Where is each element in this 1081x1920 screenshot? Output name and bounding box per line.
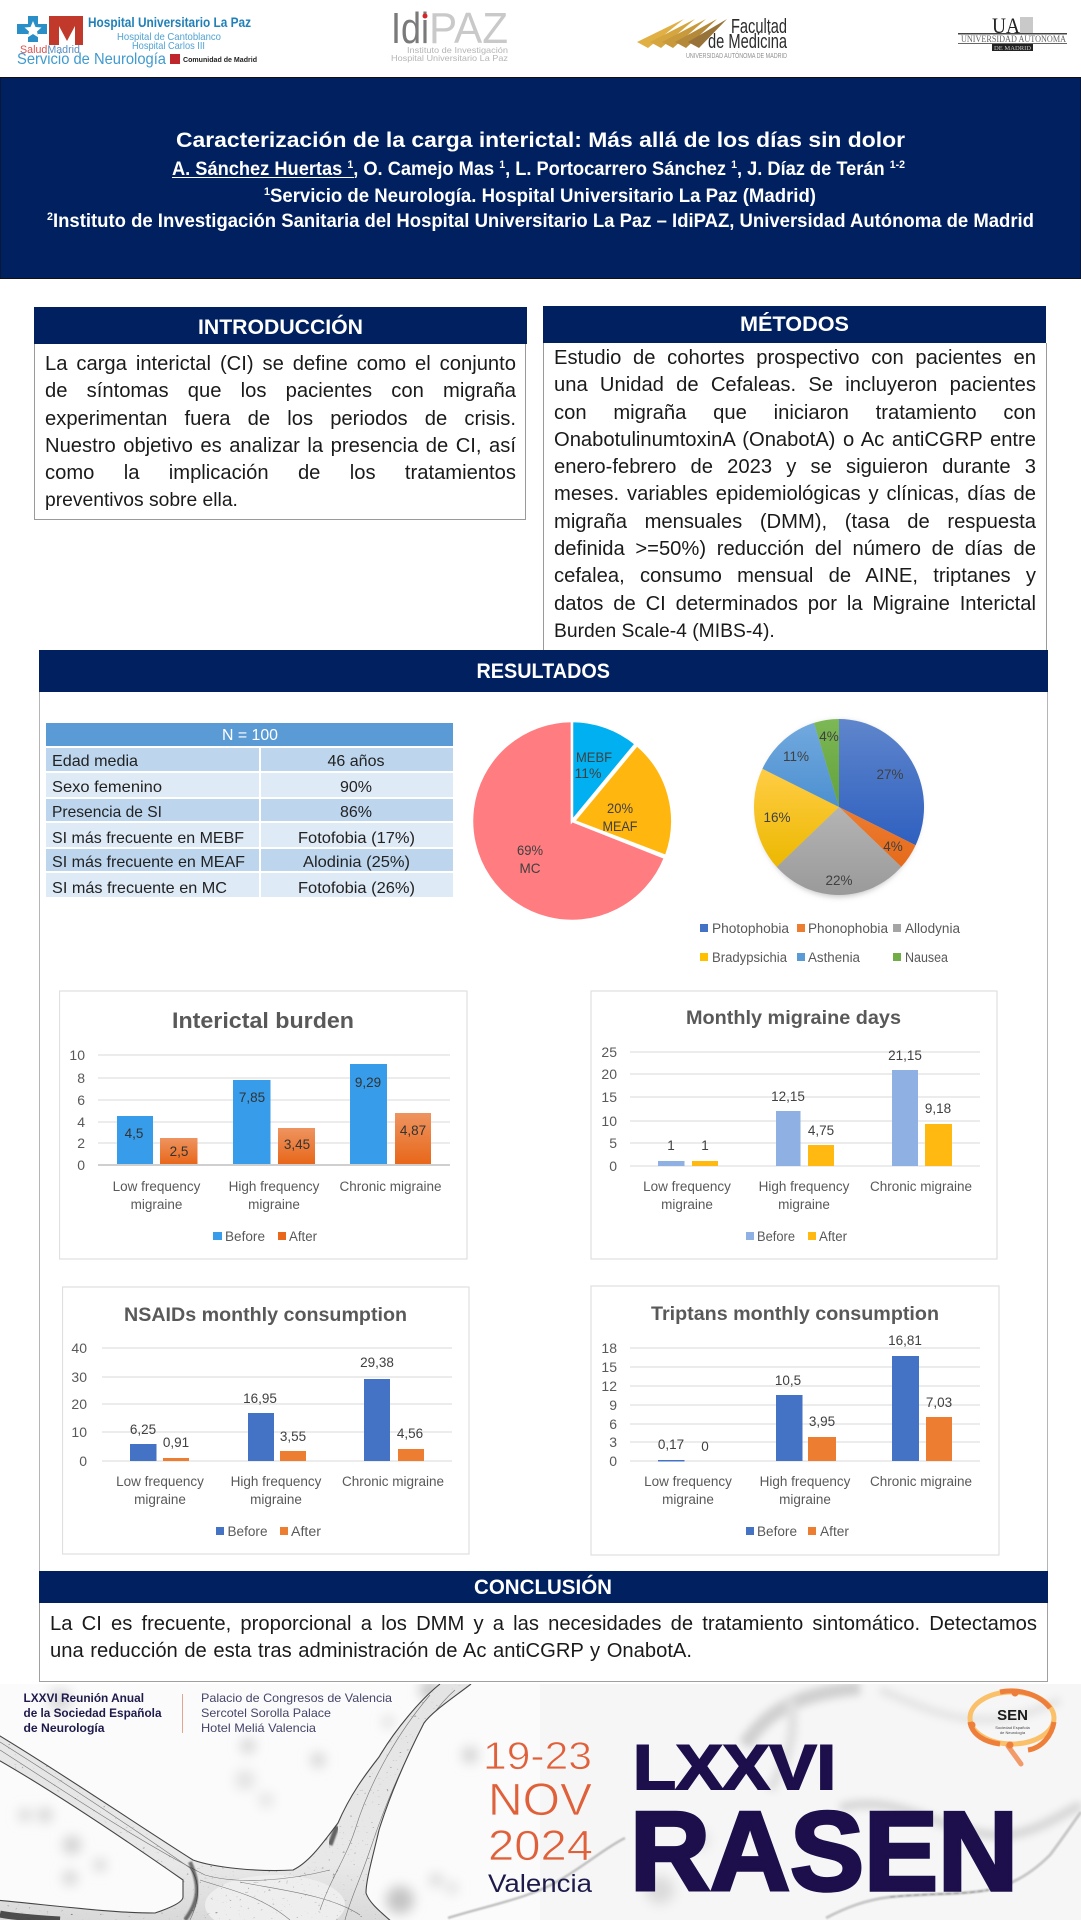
row: SI en MEBF: Fotofobia (17%) (298, 830, 415, 847)
row: SI en MEAF: Alodinia (25%) (303, 854, 410, 871)
text: métodos: una Unidad de Cefaleas. Se incluyeron pacientes (554, 374, 1036, 396)
logo: Hospital Universitario La Paz (17, 14, 257, 68)
axis and gridlines: 10 (71, 1424, 87, 1440)
legend (746, 1524, 850, 1539)
congress name: de Neurología (24, 1721, 105, 1735)
slice: photophobia 27% (839, 719, 924, 845)
footer banner: congress (0, 1684, 1081, 1920)
category labels: migraine (778, 1197, 830, 1212)
category labels: Low frequency (643, 1179, 731, 1194)
data labels: 29,38 (360, 1355, 394, 1370)
row: presencia de SI (46, 799, 453, 821)
blurred background cells (19, 1680, 709, 1914)
row: SI en MC (46, 873, 453, 897)
axis and gridlines (601, 1044, 980, 1174)
row: SI en MEAF: SI más frecuente en MEAF (52, 854, 245, 871)
slice: allodynia 22% (777, 807, 901, 895)
category labels: migraine (662, 1492, 714, 1507)
pie chart: interictal symptoms (700, 718, 960, 965)
pie legend: Nausea (905, 950, 948, 965)
panel: conclusión (39, 1571, 1048, 1682)
row: edad media (46, 748, 453, 771)
authors: A. Sánchez Huertas (172, 159, 349, 180)
category labels: Low frequency (644, 1474, 732, 1489)
category labels: migraine (779, 1492, 831, 1507)
data labels (130, 1355, 423, 1450)
data labels: 0,91 (163, 1435, 189, 1450)
affiliation 1: 1 (264, 186, 270, 198)
row: SI en MC: Fotofobia (26%) (298, 880, 415, 897)
legend (746, 1229, 847, 1244)
heading: resultados: RESULTADOS (476, 660, 610, 683)
logo: SEN: Sociedad Española (995, 1725, 1031, 1730)
data labels: 7,85 (239, 1090, 265, 1105)
text: conclusión (39, 1603, 1048, 1682)
row: sexo femenino (46, 773, 453, 797)
axis and gridlines: 30 (71, 1369, 87, 1385)
data labels: 16,81 (888, 1333, 922, 1348)
authors: 1-2 (890, 159, 905, 171)
data labels (658, 1333, 952, 1454)
city: Valencia (488, 1870, 592, 1898)
category labels: High frequency (231, 1474, 322, 1489)
data labels (667, 1048, 951, 1153)
congress dates: 19-23 (483, 1735, 592, 1778)
panel: resultados (39, 650, 1048, 1571)
slice: bradypsichia 16% (754, 769, 839, 867)
logo: Facultad de Medicina: Facultad (731, 16, 787, 38)
axis and gridlines: 5 (609, 1135, 617, 1151)
axis and gridlines: 0 (77, 1157, 85, 1173)
axis and gridlines: 15 (601, 1089, 617, 1105)
data labels: 10,5 (775, 1373, 801, 1388)
text: introducción (34, 344, 526, 520)
table header (46, 723, 453, 746)
pie legend: Photophobia (712, 921, 789, 936)
axis and gridlines: 40 (71, 1340, 87, 1356)
pie labels: 69% (517, 842, 543, 858)
pie labels: 27% (876, 767, 904, 782)
logo: Facultad de Medicina: UNIVERSIDAD AUTÓNOMA DE MADRID (686, 51, 787, 60)
venues: Palacio de Congresos de Valencia (201, 1691, 392, 1705)
axis and gridlines: 3 (609, 1434, 617, 1450)
text: métodos: Estudio de cohortes prospectivo con pacientes en (554, 347, 1036, 369)
data labels: 21,15 (888, 1048, 922, 1063)
row: sexo femenino: Sexo femenino (52, 779, 162, 796)
text: introducción: como la implicación de los tratamientos (45, 462, 516, 484)
bars (658, 1070, 952, 1166)
legend: Before (757, 1524, 797, 1539)
data labels: 0,17 (658, 1437, 684, 1452)
legend (213, 1229, 317, 1244)
category labels: High frequency (229, 1179, 320, 1194)
slice: MEAF 20% (574, 745, 672, 856)
data labels (125, 1075, 426, 1159)
axis and gridlines: 0 (609, 1453, 617, 1469)
category labels: Chronic migraine (870, 1179, 972, 1194)
bar chart: interictal burden (59, 990, 468, 1260)
axis and gridlines: 20 (71, 1396, 87, 1412)
row: edad media: Edad media (52, 753, 138, 770)
axis and gridlines: 0 (609, 1158, 617, 1174)
category labels: High frequency (760, 1474, 851, 1489)
heading: introducción (34, 307, 527, 344)
logo: Hospital Universitario La Paz: Hospital Universitario La Paz (88, 14, 251, 30)
row: presencia de SI: 86% (340, 804, 372, 821)
bar chart: NSAIDs monthly consumption (62, 1286, 470, 1554)
panel: introducción (34, 307, 527, 520)
axis and gridlines: 20 (601, 1066, 617, 1082)
affiliation 2: 2 (47, 211, 53, 223)
title banner (0, 77, 1081, 279)
pie labels: MC (520, 860, 540, 876)
legend: Before (757, 1229, 795, 1244)
legend: After (291, 1524, 322, 1539)
text: métodos: OnabotulinumtoxinA (OnabotA) o Ac antiCGRP entre (554, 429, 1036, 451)
pie labels: 11% (783, 749, 809, 764)
data labels: 0 (701, 1439, 709, 1454)
row: edad media: 46 años (328, 753, 384, 770)
axis and gridlines (601, 1340, 980, 1469)
text: métodos: con migraña que iniciaron tratamiento con (554, 402, 1036, 424)
slice: MEBF 11% (572, 721, 636, 821)
axis and gridlines: 10 (601, 1113, 617, 1129)
pie labels: 4% (883, 839, 903, 854)
logo: Universidad Autónoma de Madrid (958, 13, 1067, 52)
legend: Before (228, 1524, 268, 1539)
text: conclusión: una reducción de esta tras administración de Ac antiCGRP y OnabotA. (50, 1640, 692, 1662)
category labels: migraine (248, 1197, 300, 1212)
data labels: 3,95 (809, 1414, 835, 1429)
logo: Hospital Universitario La Paz: Hospital de Cantoblanco (117, 31, 221, 43)
category labels (116, 1474, 444, 1507)
panel: métodos (543, 306, 1047, 650)
data labels: 9,29 (355, 1075, 381, 1090)
heading: métodos (543, 306, 1046, 343)
authors: , O. Camejo Mas (353, 159, 499, 180)
logo: Hospital Universitario La Paz: Comunidad de Madrid (183, 57, 257, 64)
heading: conclusión: CONCLUSIÓN (474, 1575, 612, 1599)
axis and gridlines: 18 (601, 1340, 617, 1356)
pie labels: 16% (763, 810, 791, 825)
axis and gridlines: 15 (601, 1359, 617, 1375)
axis and gridlines: 12 (601, 1378, 617, 1394)
pie labels: 4% (819, 729, 839, 744)
data labels: 3,45 (284, 1137, 310, 1152)
data labels: 9,18 (925, 1101, 951, 1116)
logo: IdiPAZ: PAZ (429, 4, 508, 53)
pie labels: MEBF (576, 749, 612, 765)
logo: IdiPAZ (391, 4, 508, 63)
pie labels: 22% (825, 873, 853, 888)
row: sexo femenino: 90% (340, 779, 372, 796)
axis and gridlines (71, 1340, 452, 1469)
bars (117, 1064, 431, 1164)
logo: Universidad Autónoma de Madrid: UA (992, 13, 1020, 38)
pie legend: Allodynia (905, 921, 960, 936)
congress name (24, 1691, 162, 1735)
category labels (643, 1179, 972, 1212)
authors: 1 (347, 159, 353, 171)
text: introducción: experimentan fuera de los periodos de crisis. (45, 408, 516, 430)
text: métodos: migraña mensuales (DMM), (tasa de respuesta (554, 511, 1036, 533)
axis and gridlines: 6 (609, 1416, 617, 1432)
congress dates: NOV (488, 1774, 592, 1825)
affiliation 2: Instituto de Investigación Sanitaria del Hospital Universitario La Paz – IdiPAZ, Universidad Autónoma de Madrid (53, 211, 1034, 232)
axis and gridlines: 6 (77, 1092, 85, 1108)
text: métodos (543, 343, 1047, 651)
category labels (113, 1179, 442, 1212)
heading: conclusión (39, 1571, 1048, 1603)
logo: Hospital Universitario La Paz: Hospital Carlos III (132, 40, 205, 52)
logo: Universidad Autónoma de Madrid: UNIVERSIDAD AUTONOMA (961, 34, 1066, 44)
data labels: 2,5 (170, 1144, 188, 1159)
congress wordmark: RASEN (630, 1789, 1018, 1914)
legend (216, 1524, 322, 1539)
row: SI en MEBF: SI más frecuente en MEBF (52, 830, 244, 847)
category labels: migraine (131, 1197, 182, 1212)
logo: Facultad de Medicina: de Medicina (708, 31, 788, 53)
slice: MC 69% (472, 721, 665, 921)
pie labels: 20% (607, 800, 633, 816)
congress dates: 2024 (488, 1822, 593, 1870)
authors: 1 (731, 159, 737, 171)
pie labels (763, 729, 904, 888)
data labels: 4,5 (125, 1126, 143, 1141)
category labels: Low frequency (113, 1179, 201, 1194)
text: métodos: definida >=50%) reducción del número de días de (554, 538, 1036, 560)
logo: IdiPAZ: Idi (391, 4, 429, 53)
heading: introducción: INTRODUCCIÓN (198, 315, 363, 339)
text: introducción: preventivos sobre ella. (45, 490, 238, 511)
row: SI en MC: SI más frecuente en MC (52, 880, 227, 897)
thin neurites (448, 1812, 1081, 1918)
chart title: Triptans monthly consumption (651, 1304, 939, 1325)
text: introducción: Nuestro objetivo es analizar la presencia de CI, así (45, 435, 516, 457)
axis and gridlines: 4 (77, 1114, 85, 1130)
logo: SEN: SEN (997, 1707, 1028, 1724)
venues (201, 1691, 392, 1735)
logo: Universidad Autónoma de Madrid: DE MADRID (994, 45, 1031, 52)
pie legend: Asthenia (808, 950, 860, 965)
venues: Hotel Meliá Valencia (201, 1721, 316, 1735)
data labels: 1 (667, 1138, 675, 1153)
bar chart: triptans monthly consumption (590, 1286, 1000, 1556)
row: SI en MEBF (46, 823, 453, 847)
bar chart: monthly migraine days (590, 990, 998, 1260)
category labels (644, 1474, 972, 1507)
pie legend: Bradypsichia (712, 950, 787, 965)
axis and gridlines: 2 (77, 1135, 85, 1151)
authors: 1 (499, 159, 505, 171)
data labels: 4,75 (808, 1123, 834, 1138)
data labels: 1 (701, 1138, 709, 1153)
legend: After (289, 1229, 317, 1244)
venues: Sercotel Sorolla Palace (201, 1706, 331, 1720)
faint background dendrites (745, 1688, 1081, 1835)
text: introducción: de síntomas que los pacientes con migraña (45, 380, 516, 402)
logo: IdiPAZ: Hospital Universitario La Paz (391, 53, 508, 63)
heading: métodos: MÉTODOS (740, 313, 849, 336)
text: métodos: enero-febrero de 2023 y se siguieron durante 3 (554, 456, 1036, 478)
affiliation 1: Servicio de Neurología. Hospital Universitario La Paz (Madrid) (270, 186, 816, 207)
pie legend: Phonophobia (808, 921, 888, 936)
category labels: Low frequency (116, 1474, 204, 1489)
data labels: 3,55 (280, 1429, 306, 1444)
text: métodos: Burden Scale-4 (MIBS-4). (554, 621, 775, 642)
bars (658, 1356, 952, 1462)
pie labels (517, 749, 638, 876)
slice: asthenia 11% (762, 723, 839, 807)
legend: Before (225, 1229, 265, 1244)
logo: Hospital Universitario La Paz: Servicio de Neurología (17, 51, 166, 68)
congress name: LXXVI Reunión Anual (24, 1691, 144, 1705)
text: métodos: datos de CI determinados por la Migraine Interictal (554, 593, 1036, 615)
text: métodos: meses. variables epidemiológicas y clínicas, días de (554, 483, 1036, 505)
text: introducción: La carga interictal (CI) se define como el conjunto (45, 353, 516, 375)
authors: , L. Portocarrero Sánchez (505, 159, 731, 180)
category labels: Chronic migraine (342, 1474, 444, 1489)
logo: Hospital Universitario La Paz: SaludMadrid (20, 44, 80, 56)
logo strip (17, 4, 1067, 68)
category labels: Chronic migraine (870, 1474, 972, 1489)
chart title: Interictal burden (172, 1008, 354, 1033)
table: cohort characteristics (46, 723, 453, 897)
category labels: migraine (661, 1197, 713, 1212)
neuron (0, 1684, 485, 1920)
congress name: de la Sociedad Española (24, 1706, 162, 1720)
logo: IdiPAZ: Instituto de Investigación (407, 45, 508, 55)
axis and gridlines (69, 1047, 450, 1173)
logo: SEN: de Neurología (1000, 1730, 1026, 1735)
data labels: 16,95 (243, 1391, 277, 1406)
slice: phonophobia 4% (839, 807, 916, 867)
table header: N = 100 (222, 727, 278, 744)
data labels: 6,25 (130, 1422, 156, 1437)
category labels: Chronic migraine (339, 1179, 442, 1194)
logo: SEN (968, 1690, 1054, 1764)
data labels: 4,87 (400, 1123, 426, 1138)
pie labels: 11% (574, 765, 602, 781)
data labels: 7,03 (926, 1395, 952, 1410)
pie chart: migraine type (473, 722, 672, 920)
slice: nausea 4% (814, 719, 839, 807)
legend: After (819, 1229, 847, 1244)
category labels: migraine (250, 1492, 302, 1507)
pie labels: MEAF (602, 818, 638, 834)
title: Caracterización de la carga interictal: Más allá de los días sin dolor (176, 128, 906, 152)
category labels: High frequency (759, 1179, 850, 1194)
chart title: Monthly migraine days (686, 1008, 901, 1029)
legend: After (820, 1524, 850, 1539)
heading: resultados (39, 650, 1048, 692)
authors (172, 159, 905, 180)
text: conclusión: La CI es frecuente, proporcional a los DMM y a las necesidades de tratamiento sintomático. Detectamos (50, 1613, 1037, 1635)
pie legend (700, 921, 960, 965)
chart title: NSAIDs monthly consumption (124, 1305, 407, 1326)
congress dates (483, 1735, 593, 1870)
text: métodos: cefalea, consumo mensual de AINE, triptanes y (554, 565, 1036, 587)
congress wordmark: LXXVI (633, 1733, 836, 1803)
axis and gridlines: 9 (609, 1397, 617, 1413)
row: SI en MEAF (46, 849, 453, 871)
logo: Facultad de Medicina (637, 16, 788, 60)
axis and gridlines: 8 (77, 1070, 85, 1086)
data labels: 12,15 (771, 1089, 805, 1104)
authors: , J. Díaz de Terán (737, 159, 890, 180)
row: presencia de SI: Presencia de SI (52, 804, 162, 821)
congress wordmark (630, 1733, 1018, 1914)
bars (130, 1379, 424, 1461)
axis and gridlines: 0 (79, 1453, 87, 1469)
category labels: migraine (134, 1492, 186, 1507)
axis and gridlines: 25 (601, 1044, 617, 1060)
data labels: 4,56 (397, 1426, 423, 1441)
axis and gridlines: 10 (69, 1047, 85, 1063)
